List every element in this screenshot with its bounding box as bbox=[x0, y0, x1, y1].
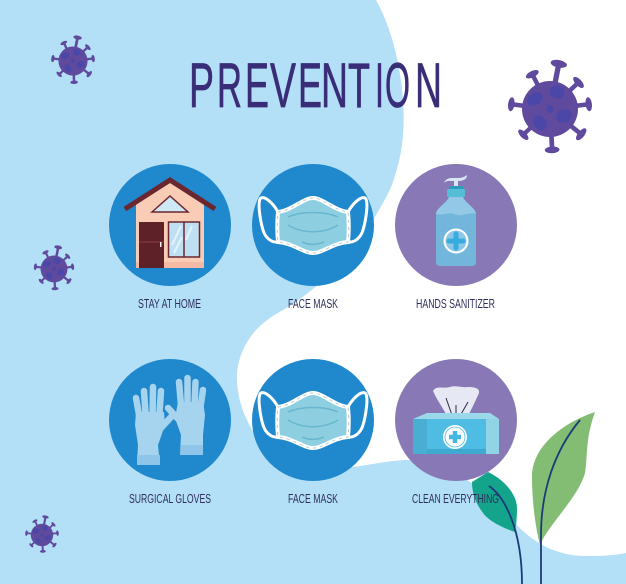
label: face mask: FACE MASK bbox=[288, 491, 338, 506]
title: I bbox=[375, 51, 384, 121]
title: N bbox=[321, 51, 348, 121]
label: stay at home: STAY AT HOME bbox=[138, 296, 201, 311]
icon: virus top left bbox=[51, 35, 95, 84]
icon: surgical gloves bbox=[109, 359, 231, 481]
icon: clean everything bbox=[395, 359, 517, 481]
label: surgical gloves: SURGICAL GLOVES bbox=[129, 491, 211, 506]
label: face mask: FACE MASK bbox=[288, 296, 338, 311]
leaf: green bbox=[532, 412, 595, 584]
icon: virus large bbox=[507, 59, 593, 154]
title: E bbox=[298, 51, 322, 121]
title: O bbox=[385, 51, 410, 121]
title: E bbox=[245, 51, 269, 121]
title bbox=[189, 51, 442, 121]
title: R bbox=[217, 51, 242, 121]
title: T bbox=[348, 51, 370, 121]
icon: face mask bbox=[252, 359, 374, 481]
title: N bbox=[415, 51, 442, 121]
icon: hands sanitizer bbox=[395, 164, 517, 286]
title: P bbox=[189, 51, 214, 121]
icon: virus middle left bbox=[33, 245, 75, 290]
label: hands sanitizer: HANDS SANITIZER bbox=[416, 296, 495, 311]
icon: stay at home bbox=[109, 164, 231, 286]
icon: virus bottom left bbox=[25, 515, 59, 553]
title: V bbox=[270, 51, 296, 121]
leaf: teal bbox=[472, 472, 522, 584]
icon: face mask bbox=[252, 164, 374, 286]
label: clean everything: CLEAN EVERYTHING bbox=[412, 491, 499, 506]
background: white blob bbox=[237, 0, 626, 556]
